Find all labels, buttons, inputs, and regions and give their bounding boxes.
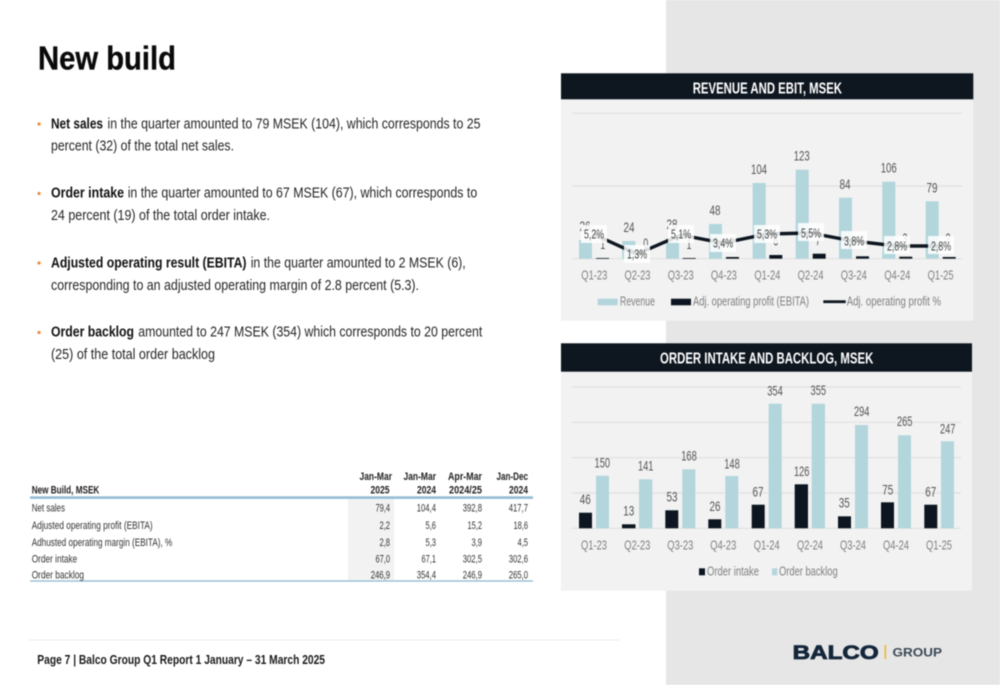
table row: adjusted operating profit: 2,2 (380, 520, 390, 532)
bar value labels: 48 (710, 202, 721, 218)
table row: adjusted operating profit: Adjusted operating profit (EBITA) (32, 520, 153, 532)
bullet: adjusted operating result: corresponding to an adjusted operating margin of 2.8 percent (5.3). (51, 277, 419, 294)
panel heading: revenue and EBIT (561, 73, 973, 99)
table row: order intake: 302,5 (463, 553, 482, 565)
bar value labels: 141 (638, 458, 654, 474)
bar value labels: 2 (946, 230, 951, 246)
table row: order intake: 302,6 (509, 553, 528, 565)
bar value labels: 67 (925, 484, 936, 500)
bar value labels: 355 (811, 382, 826, 398)
footer: Page 7 | Balco Group Q1 Report 1 January – 31 March 2025 (37, 652, 325, 667)
bar value labels: 46 (580, 491, 591, 507)
bullet: adjusted operating result (37, 254, 466, 294)
bar value labels: 26 (580, 218, 591, 234)
bar value labels: 75 (882, 481, 893, 497)
table row: net sales: 104,4 (417, 503, 436, 515)
bar value labels: 123 (794, 148, 810, 164)
bullet: net sales: percent (32) of the total net sales. (51, 138, 234, 155)
bar value labels: 148 (724, 455, 740, 471)
bullet: order intake: 24 percent (19) of the total order intake. (51, 207, 270, 224)
bar value labels: 294 (854, 403, 870, 419)
table header (32, 471, 528, 496)
table row: net sales: 79,4 (376, 503, 390, 515)
table row: net sales: 392,8 (463, 503, 482, 515)
table row: order backlog (32, 570, 528, 582)
bar value labels: 150 (595, 454, 610, 470)
percent labels: 5,2% (584, 228, 604, 242)
logo: Balco Group (793, 642, 942, 664)
table row: order backlog: 246,9 (371, 570, 390, 582)
x axis labels: Q4-23 (710, 537, 736, 552)
x axis labels: Q2-23 (624, 267, 650, 282)
order intake bars (579, 484, 937, 528)
table row: order backlog: Order backlog (32, 570, 84, 582)
x axis labels: Q4-23 (711, 267, 737, 282)
panel heading: order intake and backlog (561, 343, 972, 372)
table row: order backlog: 265,0 (509, 570, 528, 582)
percent labels: 5,3% (757, 228, 777, 242)
table row: order intake: Order intake (32, 553, 77, 565)
bullet: order intake: in the quarter amounted to 67 MSEK (67), which corresponds to (128, 185, 477, 202)
table row: adjusted operating margin: Adhusted operating margin (EBITA), % (32, 537, 172, 549)
x axis labels: Q2-24 (798, 267, 824, 282)
table: New Build, MSEK (30, 471, 533, 582)
bar value labels: 6 (773, 233, 778, 249)
EBITA bars (596, 254, 956, 259)
bullet: net sales (37, 116, 481, 155)
bullet: order intake (37, 185, 477, 224)
table header: Jan-Mar (404, 471, 437, 483)
percent labels (581, 223, 954, 263)
percent labels: 1,3% (627, 248, 647, 262)
table row: adjusted operating profit (32, 520, 528, 532)
x axis labels: Q1-23 (581, 537, 607, 552)
table row: adjusted operating margin (32, 537, 528, 549)
bullet: order intake: Order intake (51, 185, 124, 202)
bar value labels: 104 (751, 161, 767, 177)
x axis labels: Q1-25 (926, 537, 952, 552)
table header: Jan-Dec (496, 471, 528, 483)
table header: Apr-Mar (448, 471, 483, 483)
table row: net sales: Net sales (32, 503, 65, 515)
bar value labels: 1 (686, 236, 692, 252)
bar value labels: 53 (666, 489, 678, 505)
bar value labels: 84 (840, 176, 851, 192)
bar value labels: 265 (897, 413, 913, 429)
bar value labels: 35 (839, 495, 850, 511)
percent labels: 2,8% (887, 240, 907, 254)
legend (598, 294, 941, 308)
x axis labels: Q1-24 (754, 537, 780, 552)
percent labels: 5,1% (671, 228, 691, 242)
bullet: net sales: in the quarter amounted to 79 MSEK (104), which corresponds to 25 (108, 116, 480, 132)
x axis labels: Q3-23 (668, 267, 694, 282)
table row: adjusted operating margin: 2,8 (380, 537, 390, 549)
table row: net sales: 417,7 (509, 503, 528, 515)
bullet: order backlog: Order backlog (51, 324, 134, 341)
table header: Jan-Mar (360, 471, 393, 483)
percent labels: 3,4% (713, 236, 733, 250)
bar value labels (580, 148, 951, 252)
table row: adjusted operating margin: 4,5 (518, 537, 528, 549)
table row: adjusted operating profit: 5,6 (426, 520, 436, 532)
bar value labels: 247 (940, 420, 956, 436)
x axis labels: Q1-25 (928, 267, 954, 282)
bar value labels (580, 382, 956, 519)
table row: order intake (32, 553, 528, 565)
panel heading: revenue and EBIT: REVENUE AND EBIT, MSEK (693, 80, 842, 98)
bar value labels: 67 (752, 484, 764, 500)
x axis labels: Q4-24 (884, 267, 910, 282)
table header: 2024 (417, 484, 436, 496)
bullet: net sales: Net sales (51, 116, 103, 132)
bar value labels: 3 (860, 232, 865, 248)
bar value labels: 0 (643, 235, 648, 251)
table header: 2025 (370, 484, 390, 496)
bullet: order backlog: (25) of the total order backlog (51, 346, 215, 363)
legend: Adj. operating profit % (847, 294, 941, 308)
x axis labels: Q3-23 (667, 537, 693, 552)
bar value labels: 26 (710, 498, 721, 514)
x axis labels: Q3-24 (841, 267, 867, 282)
legend: Order backlog (779, 563, 838, 578)
panel heading: order intake and backlog: ORDER INTAKE AND BACKLOG, MSEK (660, 350, 873, 368)
line: adjusted operating profit percent (593, 233, 941, 254)
x axis labels: Q1-24 (754, 267, 780, 282)
bar value labels: 354 (767, 383, 783, 399)
legend: Revenue (620, 294, 655, 308)
revenue bars (579, 170, 939, 259)
bullet: adjusted operating result: in the quarter amounted to 2 MSEK (6), (251, 254, 466, 271)
bar value labels: 79 (926, 179, 938, 195)
legend (699, 563, 838, 578)
bullet: adjusted operating result: Adjusted operating result (EBITA) (51, 254, 246, 271)
bar value labels: 3 (902, 230, 908, 246)
percent labels: 5,5% (801, 226, 821, 240)
bullet: order backlog: amounted to 247 MSEK (354) which corresponds to 20 percent (138, 324, 483, 341)
table row: adjusted operating profit: 18,6 (514, 520, 528, 532)
x axis labels: Q3-24 (840, 537, 866, 552)
table row: adjusted operating margin: 3,9 (472, 537, 482, 549)
table row: order backlog: 246,9 (463, 570, 482, 582)
legend: Order intake (707, 563, 759, 578)
x axis labels (581, 267, 954, 282)
percent labels: 2,8% (931, 240, 951, 254)
legend: Adj. operating profit (EBITA) (693, 294, 809, 308)
bullet: order backlog (37, 324, 483, 363)
table header: New Build, MSEK (32, 484, 99, 496)
bar value labels: 1 (600, 236, 605, 252)
table row: order backlog: 354,4 (417, 570, 436, 582)
x axis labels: Q4-24 (883, 537, 909, 552)
title: New build (38, 40, 176, 78)
bar value labels: 7 (816, 232, 821, 248)
panel: order intake and backlog chart (561, 343, 972, 591)
table header: 2024/25 (449, 484, 482, 496)
logo: Balco Group: BALCO (793, 642, 879, 664)
percent labels: 3,8% (844, 234, 864, 248)
table row: net sales (32, 503, 528, 515)
bar value labels: 13 (623, 503, 634, 519)
bar value labels: 106 (881, 160, 897, 176)
bar value labels: 28 (666, 216, 678, 232)
x axis labels (581, 537, 952, 552)
table row: order intake: 67,0 (376, 553, 390, 565)
table row: order intake: 67,1 (422, 553, 436, 565)
order backlog bars (596, 404, 954, 528)
text block: key bullet points (37, 116, 483, 363)
x axis labels: Q2-23 (624, 537, 650, 552)
logo: Balco Group: GROUP (892, 647, 942, 659)
bar value labels: 2 (730, 234, 735, 250)
bar value labels: 24 (624, 219, 635, 235)
x axis labels: Q1-23 (581, 267, 607, 282)
bar value labels: 168 (681, 448, 697, 464)
table row: adjusted operating margin: 5,3 (426, 537, 436, 549)
x axis labels: Q2-24 (797, 537, 823, 552)
table header: 2024 (509, 484, 528, 496)
panel: revenue and EBIT chart (561, 73, 973, 321)
bar value labels: 126 (794, 463, 810, 479)
table row: adjusted operating profit: 15,2 (468, 520, 482, 532)
